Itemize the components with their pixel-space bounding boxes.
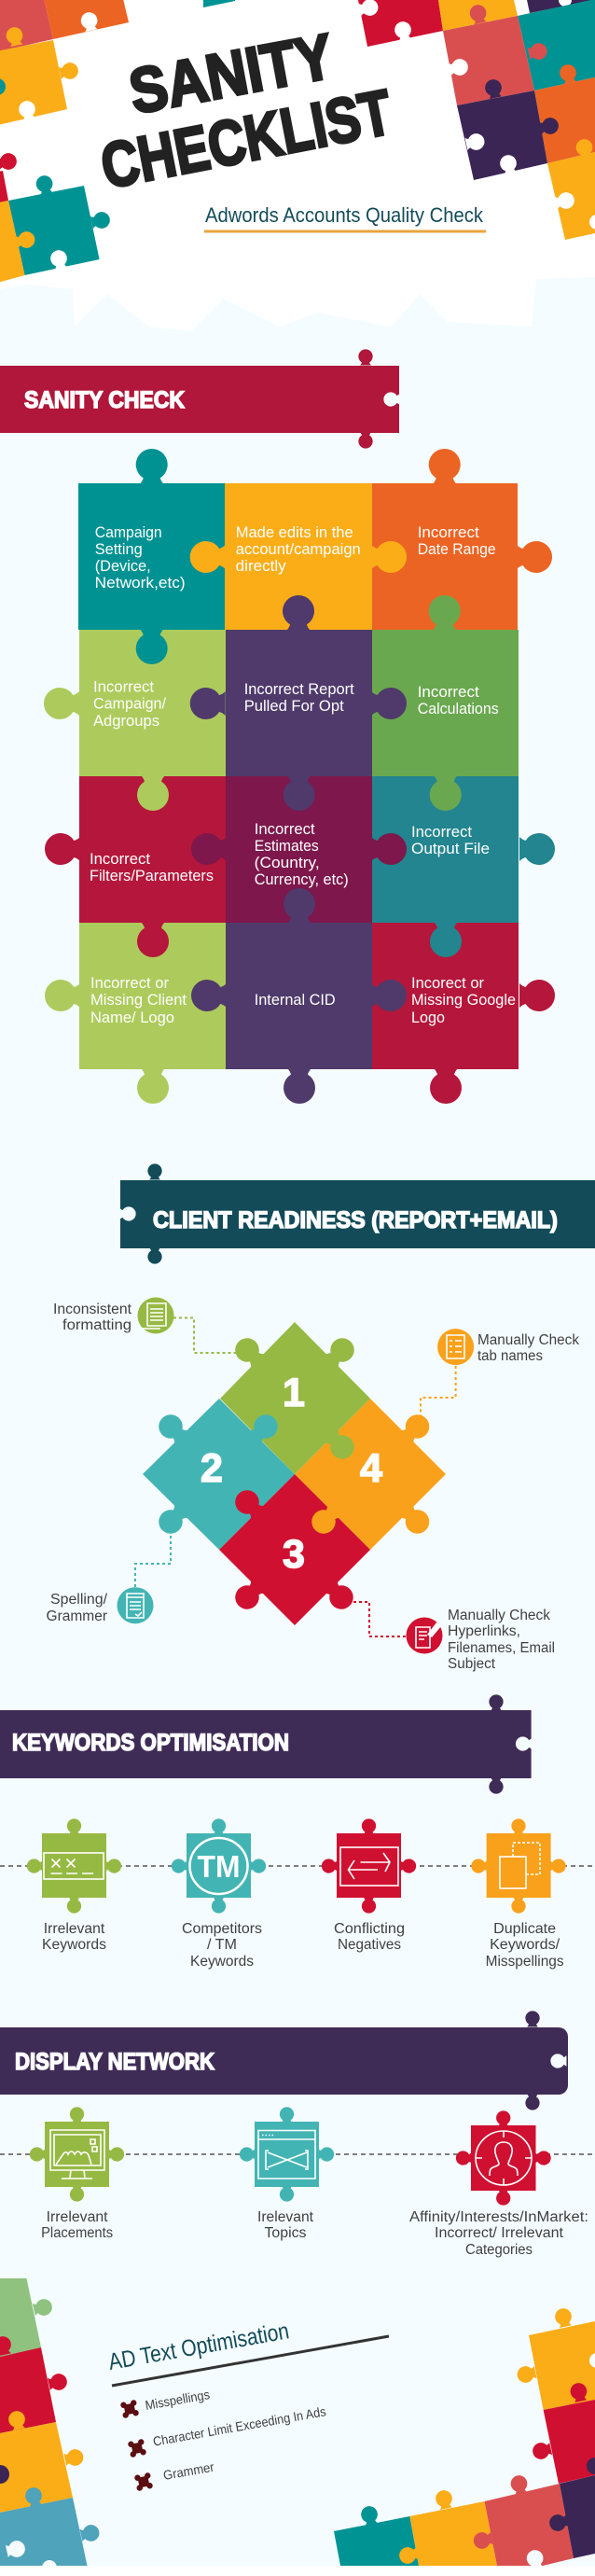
grid piece: made edits	[190, 483, 407, 630]
piece 2	[143, 1399, 295, 1550]
grid piece: incorrect estimates: (Country,	[255, 854, 320, 871]
grid piece: incorrect calculations	[372, 595, 519, 811]
grid piece: campaign setting: Campaign	[95, 523, 162, 541]
grid piece: incorrect or missing client name: Incorrect or	[90, 974, 169, 992]
callout connectors	[135, 1317, 456, 1636]
display item: irrelevant placements	[30, 2107, 124, 2241]
list: ad text issues: Character Limit Exceeding In Ads	[152, 2403, 327, 2449]
keywords connector line	[0, 1865, 595, 1867]
heading: AD text optimisation	[106, 2318, 389, 2386]
piece 4: 4	[360, 1446, 382, 1491]
header puzzle pieces: top right	[358, 0, 595, 240]
keyword item: duplicate keywords: Duplicate	[493, 1921, 556, 1937]
grid piece: internal CID: Internal CID	[255, 991, 336, 1009]
list: ad text issues: Grammer	[162, 2459, 215, 2483]
keyword item: duplicate keywords: Misspellings	[486, 1954, 564, 1970]
grid piece: incorrect campaign adgroups	[44, 630, 226, 811]
subtitle: Adwords Accounts Quality Check	[205, 203, 484, 227]
grid piece: incorrect filters: Filters/Parameters	[90, 867, 214, 884]
grid piece: incorrect output file	[372, 776, 555, 957]
grid piece: internal CID	[191, 888, 407, 1104]
keyword item: duplicate keywords	[471, 1818, 566, 1970]
grid piece: made edits: account/campaign	[236, 540, 361, 558]
grid piece: campaign setting: Network,etc)	[95, 574, 186, 592]
banner: client readiness: CLIENT READINESS (REPORT+EMAIL)	[153, 1207, 558, 1233]
grid piece: incorrect or missing google logo: Missing Google	[411, 991, 516, 1009]
bullet icon	[128, 2439, 146, 2458]
banner: display network	[0, 2011, 568, 2110]
callout: hyperlinks filenames: Subject	[448, 1656, 496, 1672]
callout: inconsistent formatting: formatting	[62, 1317, 131, 1333]
callout: spelling grammer: Grammer	[47, 1608, 107, 1624]
grid piece: incorrect or missing google logo: Logo	[411, 1009, 445, 1026]
callout: inconsistent formatting	[53, 1297, 173, 1334]
display item: irrelevant topics	[240, 2107, 334, 2241]
list: ad text issues: Misspellings	[144, 2387, 211, 2413]
grid piece: incorrect date range	[372, 449, 552, 630]
grid piece: incorrect filters	[45, 776, 226, 957]
list: ad text issues	[120, 2387, 327, 2491]
grid piece: incorrect date range: Incorrect	[418, 523, 479, 541]
piece 2: 2	[201, 1446, 223, 1491]
title	[95, 21, 397, 202]
title: CHECKLIST	[95, 77, 397, 202]
display connector line	[0, 2153, 595, 2155]
banner: sanity check: SANITY CHECK	[24, 387, 185, 413]
display item: affinity interests: Incorrect/ Irrelevant	[435, 2225, 564, 2241]
grid piece: incorrect calculations: Incorrect	[418, 683, 479, 701]
banner: sanity check	[0, 349, 399, 449]
diamond puzzle	[143, 1322, 446, 1625]
grid piece: incorrect or missing client name: Missing Client	[90, 991, 187, 1009]
heading: AD text optimisation: AD Text Optimisation	[106, 2318, 291, 2375]
piece 1	[220, 1322, 370, 1474]
grid piece: incorrect estimates: Incorrect	[255, 820, 315, 838]
grid piece: incorrect or missing google logo: Incorect or	[411, 974, 484, 992]
callout: spelling grammer	[47, 1587, 153, 1624]
grid piece: incorrect estimates: Currency, etc)	[255, 870, 349, 888]
keyword item: competitors TM: Keywords	[190, 1954, 254, 1970]
grid piece: campaign setting: (Device,	[95, 557, 151, 575]
keyword item: irrelevant keywords: Irrelevant	[44, 1921, 105, 1937]
callout: spelling grammer: Spelling/	[50, 1592, 108, 1608]
display item: affinity interests	[409, 2110, 588, 2258]
footer puzzle pieces: right	[334, 2306, 595, 2570]
banner: keywords optimisation	[0, 1694, 532, 1794]
display item: irrelevant placements: Irrelevant	[47, 2209, 108, 2225]
grid piece: made edits: directly	[236, 557, 286, 575]
display item: irrelevant placements: Placements	[41, 2225, 113, 2241]
callout: tab names: Manually Check	[477, 1332, 579, 1348]
piece 1: 1	[283, 1371, 305, 1415]
grid piece: incorrect calculations: Calculations	[418, 700, 499, 717]
keyword item: irrelevant keywords: Keywords	[42, 1937, 106, 1953]
title: SANITY	[124, 21, 339, 128]
grid piece: incorrect estimates	[191, 776, 407, 923]
grid piece: incorrect output file: Incorrect	[411, 823, 472, 841]
callout: tab names: tab names	[477, 1348, 543, 1364]
grid piece: incorrect campaign adgroups: Campaign/	[93, 695, 166, 713]
keyword item: conflicting negatives: Conflicting	[334, 1921, 405, 1937]
footer puzzle pieces: left	[0, 2278, 101, 2575]
keyword item: competitors TM: Competitors	[182, 1921, 262, 1937]
header puzzle pieces: top left	[0, 0, 129, 285]
grid piece: incorrect output file: Output File	[411, 840, 490, 857]
grid piece: incorrect filters: Incorrect	[90, 850, 150, 868]
bullet icon	[134, 2472, 153, 2491]
callout: hyperlinks filenames: Hyperlinks,	[448, 1623, 520, 1639]
banner: display network: DISPLAY NETWORK	[15, 2049, 214, 2075]
grid piece: incorrect or missing client name	[45, 923, 226, 1104]
keyword item: irrelevant keywords	[27, 1818, 121, 1953]
puzzle grid: sanity check items	[44, 449, 555, 1104]
grid piece: made edits: Made edits in the	[236, 523, 353, 541]
keyword item: competitors TM: / TM	[207, 1937, 237, 1953]
grid piece: incorrect or missing google logo	[372, 923, 555, 1104]
bullet icon	[120, 2400, 139, 2418]
callout: inconsistent formatting: Inconsistent	[53, 1302, 132, 1317]
piece 3: 3	[283, 1532, 305, 1577]
piece 4 knob	[307, 1503, 342, 1539]
callout: hyperlinks filenames: Filenames, Email	[448, 1640, 555, 1656]
banner: client readiness	[120, 1163, 595, 1264]
header puzzle piece: top centre	[203, 0, 235, 7]
callout: hyperlinks filenames	[407, 1608, 555, 1672]
grid piece: campaign setting	[78, 449, 225, 664]
grid piece: incorrect report	[190, 595, 407, 811]
display item: affinity interests: Categories	[465, 2242, 533, 2258]
grid piece: incorrect date range: Date Range	[418, 540, 496, 558]
keyword item: competitors TM: TM	[198, 1849, 241, 1884]
display item: irrelevant topics: Topics	[265, 2225, 307, 2241]
grid piece: incorrect estimates: Estimates	[255, 837, 319, 855]
grid piece: campaign setting: Setting	[95, 540, 143, 558]
page bottom margin	[0, 2566, 595, 2576]
grid piece: incorrect report: Pulled For Opt	[244, 697, 344, 715]
keyword item: conflicting negatives	[322, 1818, 416, 1953]
callout: tab names	[437, 1329, 579, 1365]
display item: irrelevant topics: Irelevant	[257, 2209, 314, 2225]
keyword item: competitors TM	[172, 1818, 266, 1970]
display item: affinity interests: Affinity/Interests/InMarket:	[409, 2209, 588, 2225]
piece 3	[219, 1474, 370, 1625]
piece 4	[295, 1399, 446, 1550]
grid piece: incorrect campaign adgroups: Adgroups	[93, 712, 159, 730]
banner: keywords optimisation: KEYWORDS OPTIMISATION	[12, 1730, 289, 1756]
callout: hyperlinks filenames: Manually Check	[448, 1608, 550, 1623]
grid piece: incorrect or missing client name: Name/ Logo	[90, 1009, 174, 1026]
keyword item: conflicting negatives: Negatives	[338, 1937, 401, 1953]
grid piece: incorrect report: Incorrect Report	[244, 680, 354, 698]
keyword item: duplicate keywords: Keywords/	[490, 1937, 560, 1953]
grid piece: incorrect campaign adgroups: Incorrect	[93, 678, 154, 696]
